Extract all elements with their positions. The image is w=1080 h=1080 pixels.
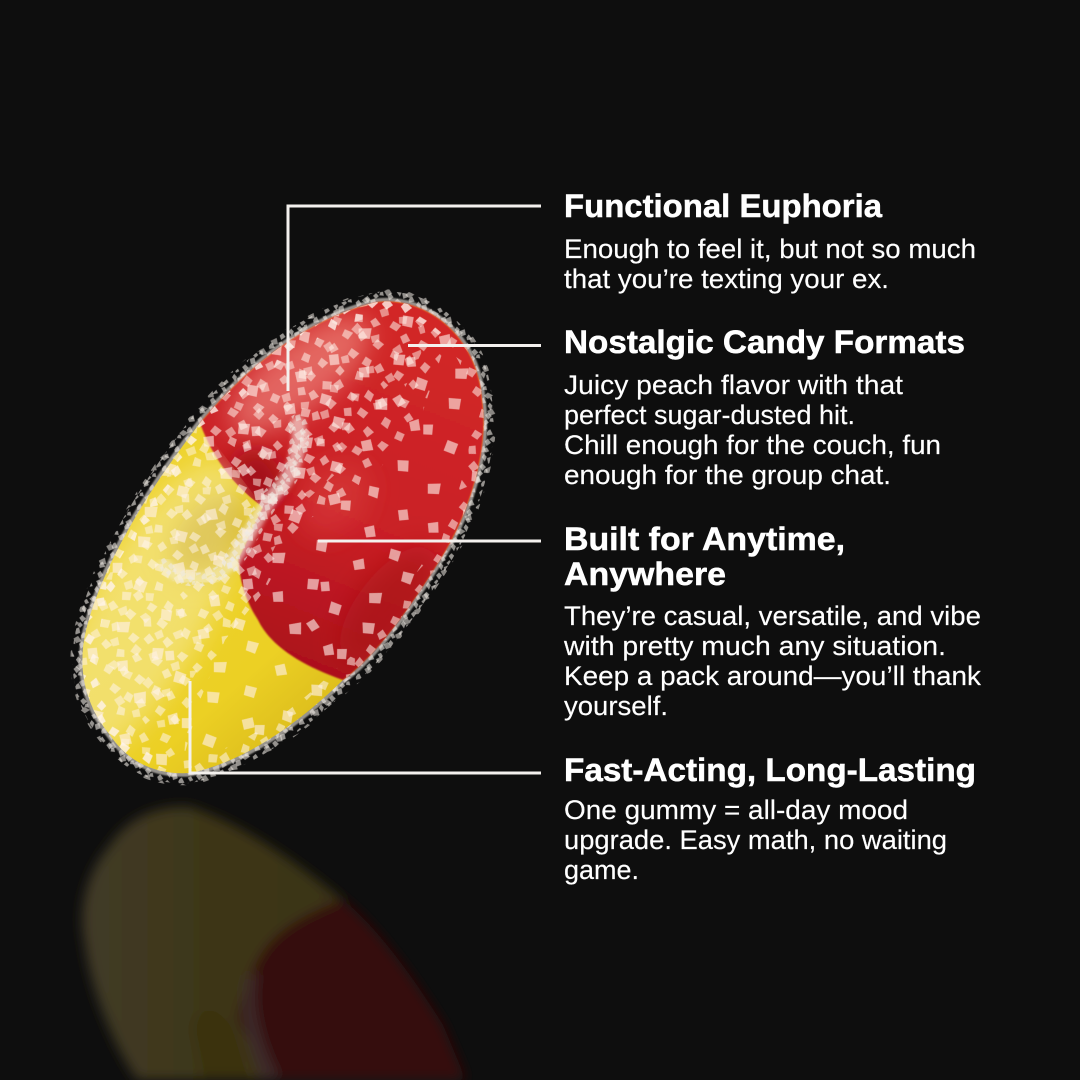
sugar haze on yellow (82, 448, 258, 754)
description: Keep a pack around—you’ll thank (564, 661, 982, 691)
sugar crystals (82, 301, 484, 772)
reflection: sugar band (243, 975, 280, 1080)
dense crystals: upper band and yellow lobe (70, 300, 445, 770)
reflection: hole (192, 1010, 248, 1080)
description: that you’re texting your ex. (564, 264, 889, 294)
heading: Fast-Acting, Long-Lasting (564, 752, 976, 788)
description: Chill enough for the couch, fun (564, 430, 941, 460)
sugar fringe (82, 301, 484, 773)
leader line: fast-acting (190, 681, 541, 773)
yellow hole shading (168, 488, 254, 574)
yellow body (82, 301, 484, 773)
description: perfect sugar-dusted hit. (564, 400, 855, 430)
leader line: nostalgic candy formats (408, 344, 541, 347)
edge crystals (82, 301, 484, 773)
leader line: built for anytime (318, 540, 541, 542)
red shading (218, 307, 445, 670)
heading: Nostalgic Candy Formats (564, 324, 965, 360)
leader line: functional euphoria (288, 206, 541, 391)
callout: functional euphoria (564, 188, 976, 294)
red body (200, 301, 484, 680)
description: Juicy peach flavor with that (564, 370, 904, 400)
reflection: red half (238, 900, 466, 1080)
heading (564, 521, 845, 592)
description (563, 601, 982, 721)
heading: Built for Anytime, (564, 521, 845, 557)
infographic canvas (70, 193, 982, 1080)
description (564, 234, 976, 294)
callout: built for anytime, anywhere (563, 521, 982, 721)
gummy reflection (82, 807, 466, 1080)
callout: nostalgic candy formats (564, 324, 965, 490)
description: with pretty much any situation. (563, 631, 946, 661)
dense crystals: second layer (70, 300, 426, 770)
description (564, 370, 941, 490)
callout: fast-acting, long-lasting (564, 752, 976, 885)
description: Enough to feel it, but not so much (564, 234, 976, 264)
description: game. (564, 855, 639, 885)
sparse large crystals (86, 314, 484, 766)
description: They’re casual, versatile, and vibe (564, 601, 981, 631)
heading: Functional Euphoria (564, 188, 882, 224)
reflection: yellow half (82, 807, 343, 1080)
description: yourself. (564, 691, 668, 721)
heading: Anywhere (564, 556, 726, 592)
description: upgrade. Easy math, no waiting (564, 825, 947, 855)
description: enough for the group chat. (564, 460, 891, 490)
gummy candy (70, 289, 496, 786)
description: One gummy = all-day mood (564, 795, 908, 825)
description (564, 795, 947, 885)
sugar ridge around hole (165, 424, 299, 580)
